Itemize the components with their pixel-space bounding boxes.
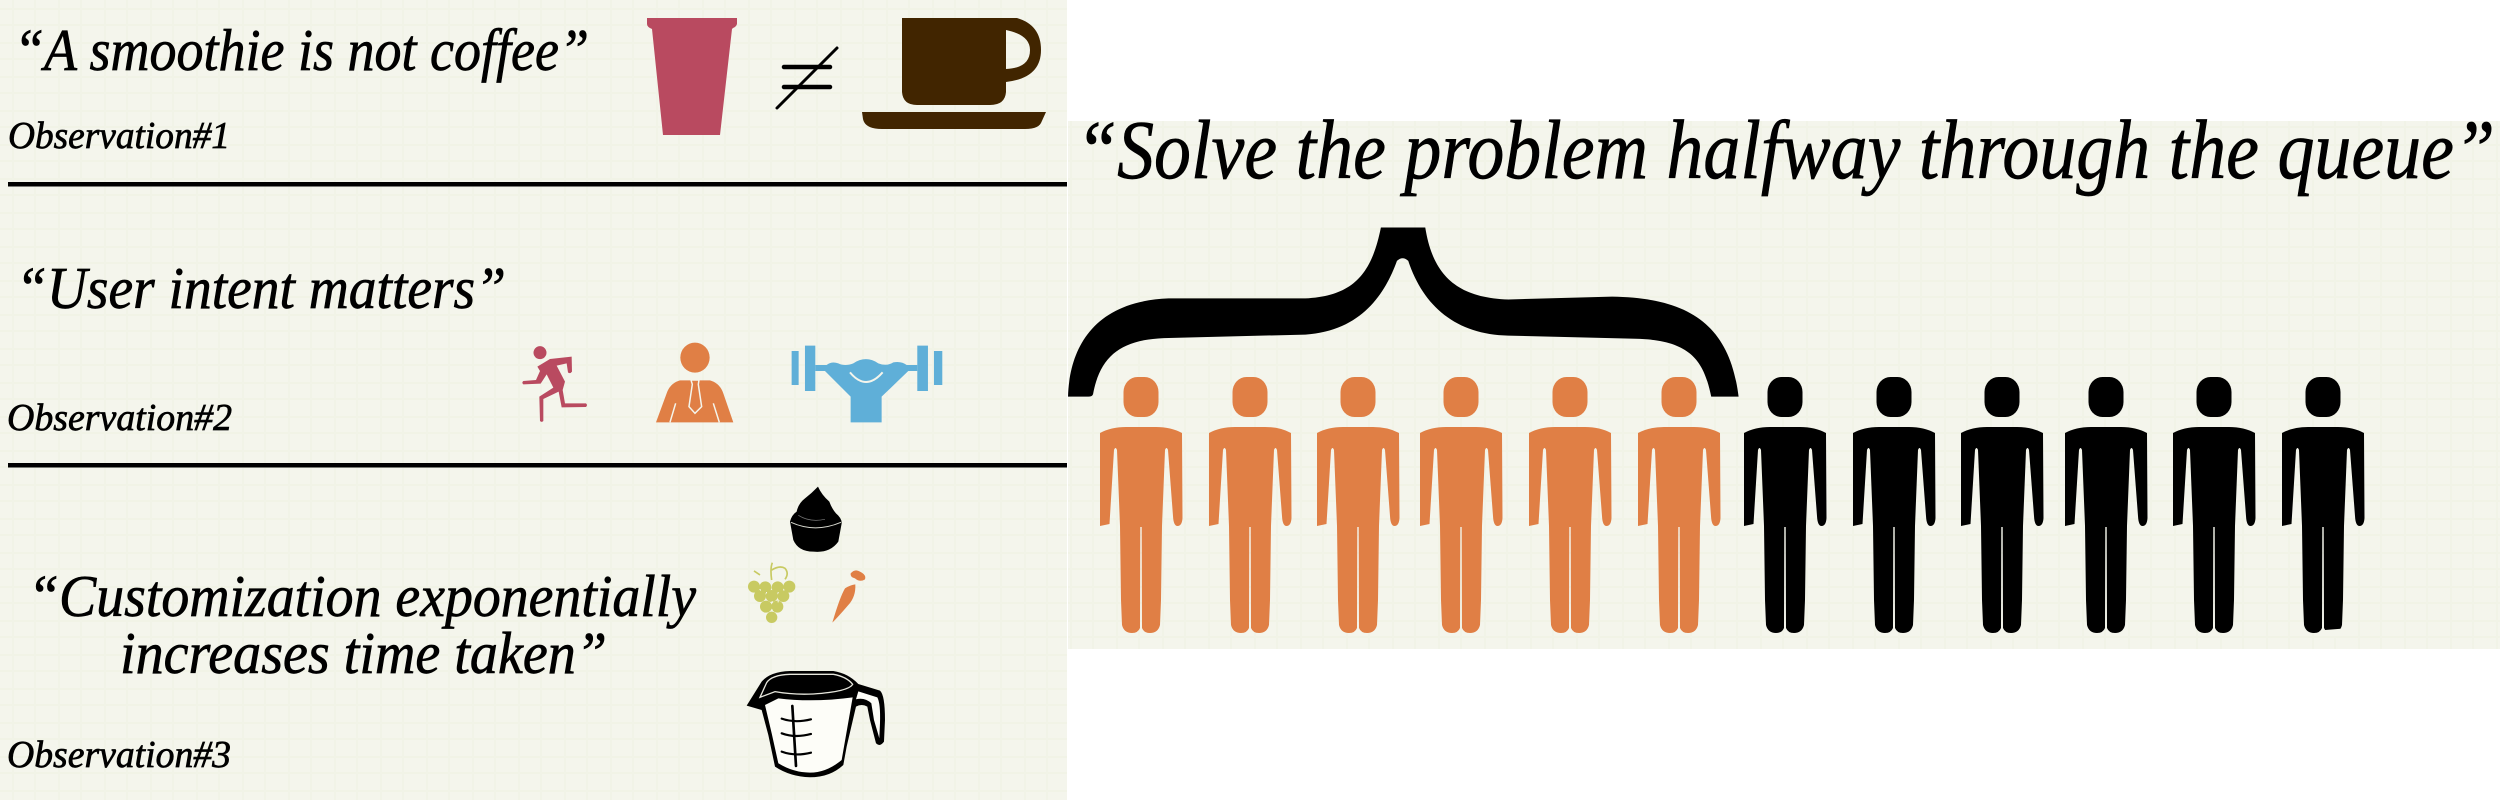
icon: weightlifter [792, 346, 942, 422]
icon: running figure [522, 346, 587, 422]
orange people group [1100, 377, 1720, 633]
divider line 2 [8, 463, 1067, 468]
heading: customization exponentially increases time taken: “Customization exponentially [28, 563, 697, 629]
person 10 [2065, 377, 2148, 633]
icon: frozen yogurt cup [790, 487, 842, 552]
icon: coffee cup and saucer [862, 18, 1046, 129]
black people group [1744, 377, 2364, 633]
heading: user intent matters: “User intent matters” [16, 255, 506, 321]
heading: a smoothie is not coffee: “A smoothie is not coffee” [14, 17, 589, 83]
person 4 [1420, 377, 1502, 633]
person 5 [1529, 377, 1612, 633]
panel: solve the problem [1068, 104, 2500, 649]
icon: carrot [832, 570, 865, 623]
icon: not equal sign [777, 48, 837, 108]
label: observation 3: Observation#3 [7, 734, 231, 776]
person 8 [1853, 377, 1936, 633]
person 12 [2282, 377, 2364, 633]
heading: customization exponentially increases time taken: increases time taken” [120, 620, 607, 686]
icon: smoothie cup [647, 18, 737, 135]
panel: observations [0, 0, 1067, 800]
person 7 [1744, 377, 1826, 633]
icon: measuring jug [747, 671, 885, 777]
person 3 [1317, 377, 1400, 633]
icon: business person [656, 343, 733, 422]
divider line 1 [8, 182, 1067, 186]
person 11 [2173, 377, 2256, 633]
curly brace [1068, 228, 1739, 397]
label: observation 1: Observation#1 [8, 115, 230, 157]
person 1 [1100, 377, 1182, 633]
person 9 [1961, 377, 2044, 633]
label: observation 2: Observation#2 [7, 397, 232, 439]
cut foot on last person [2325, 628, 2346, 636]
person 6 [1638, 377, 1720, 633]
icon: grapes [748, 563, 795, 623]
heading: customization exponentially increases time taken [28, 563, 697, 686]
person 2 [1209, 377, 1292, 633]
